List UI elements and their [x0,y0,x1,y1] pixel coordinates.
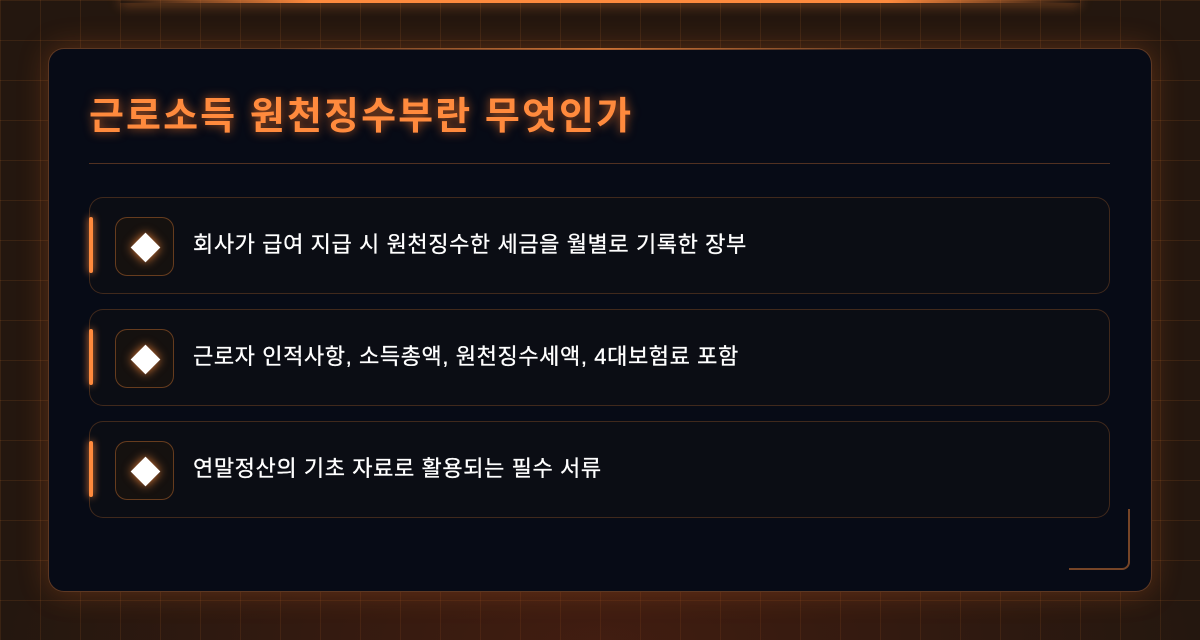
item 3 [89,421,1110,518]
title: 근로소득 원천징수부란 무엇인가 [89,96,633,138]
item 2 [89,309,1110,406]
corner bracket [1069,509,1130,570]
text 2: 근로자 인적사항, 소득총액, 원천징수세액, 4대보험료 포함 [193,344,739,369]
item 1 [89,197,1110,294]
text 3: 연말정산의 기초 자료로 활용되는 필수 서류 [193,456,602,481]
icon: diamond [115,217,174,276]
icon: diamond [115,441,174,500]
text 1: 회사가 급여 지급 시 원천징수한 세금을 월별로 기록한 장부 [193,232,747,257]
icon: diamond [115,329,174,388]
panel: main card [48,48,1152,592]
